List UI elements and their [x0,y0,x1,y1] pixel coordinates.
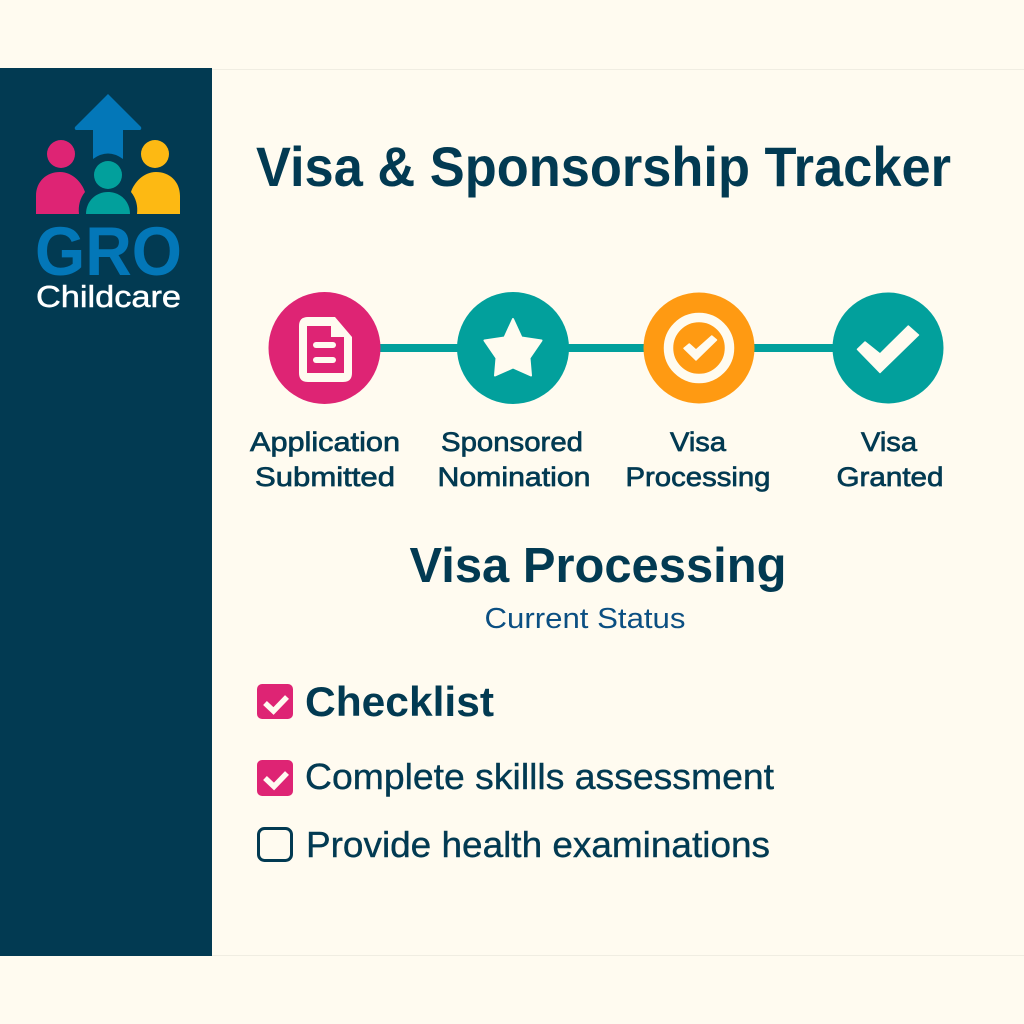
logo wordmark Childcare: Childcare [36,279,181,314]
title: Visa & Sponsorship Tracker [256,135,951,198]
checklist [257,678,774,865]
heading: current stage: Visa Processing [410,539,786,593]
logo wordmark GRO: GRO [35,213,182,290]
icon: empty box item 2 [258,828,292,860]
checklist item 2: Provide health examinations [306,824,770,865]
step 4: Visa Granted [832,292,944,492]
label: Visa [861,427,918,457]
icon: yellow person [131,140,180,214]
connector line [378,344,836,352]
icon: checked box heading [257,684,293,719]
step 3: Visa Processing [626,292,770,492]
label: Application [250,427,400,457]
step 1: Application Submitted [250,292,400,492]
icon: pink person [36,140,85,214]
subheading: current status: Current Status [484,603,686,635]
step 2: Sponsored Nomination [438,292,590,492]
icon: upward arrow [75,94,141,159]
icon: checked box item 1 [257,760,293,796]
checklist heading: Checklist [305,678,494,725]
label: Nomination [438,462,590,492]
checklist item 1: Complete skillls assessment [305,756,774,797]
progress tracker [250,292,944,492]
label: Granted [836,462,944,492]
label: Processing [626,462,770,492]
label: Submitted [255,462,395,492]
sidebar panel [0,68,212,956]
label: Visa [670,427,727,457]
logo: GRO Childcare [35,94,182,314]
label: Sponsored [441,427,583,457]
icon: teal person [86,161,130,214]
